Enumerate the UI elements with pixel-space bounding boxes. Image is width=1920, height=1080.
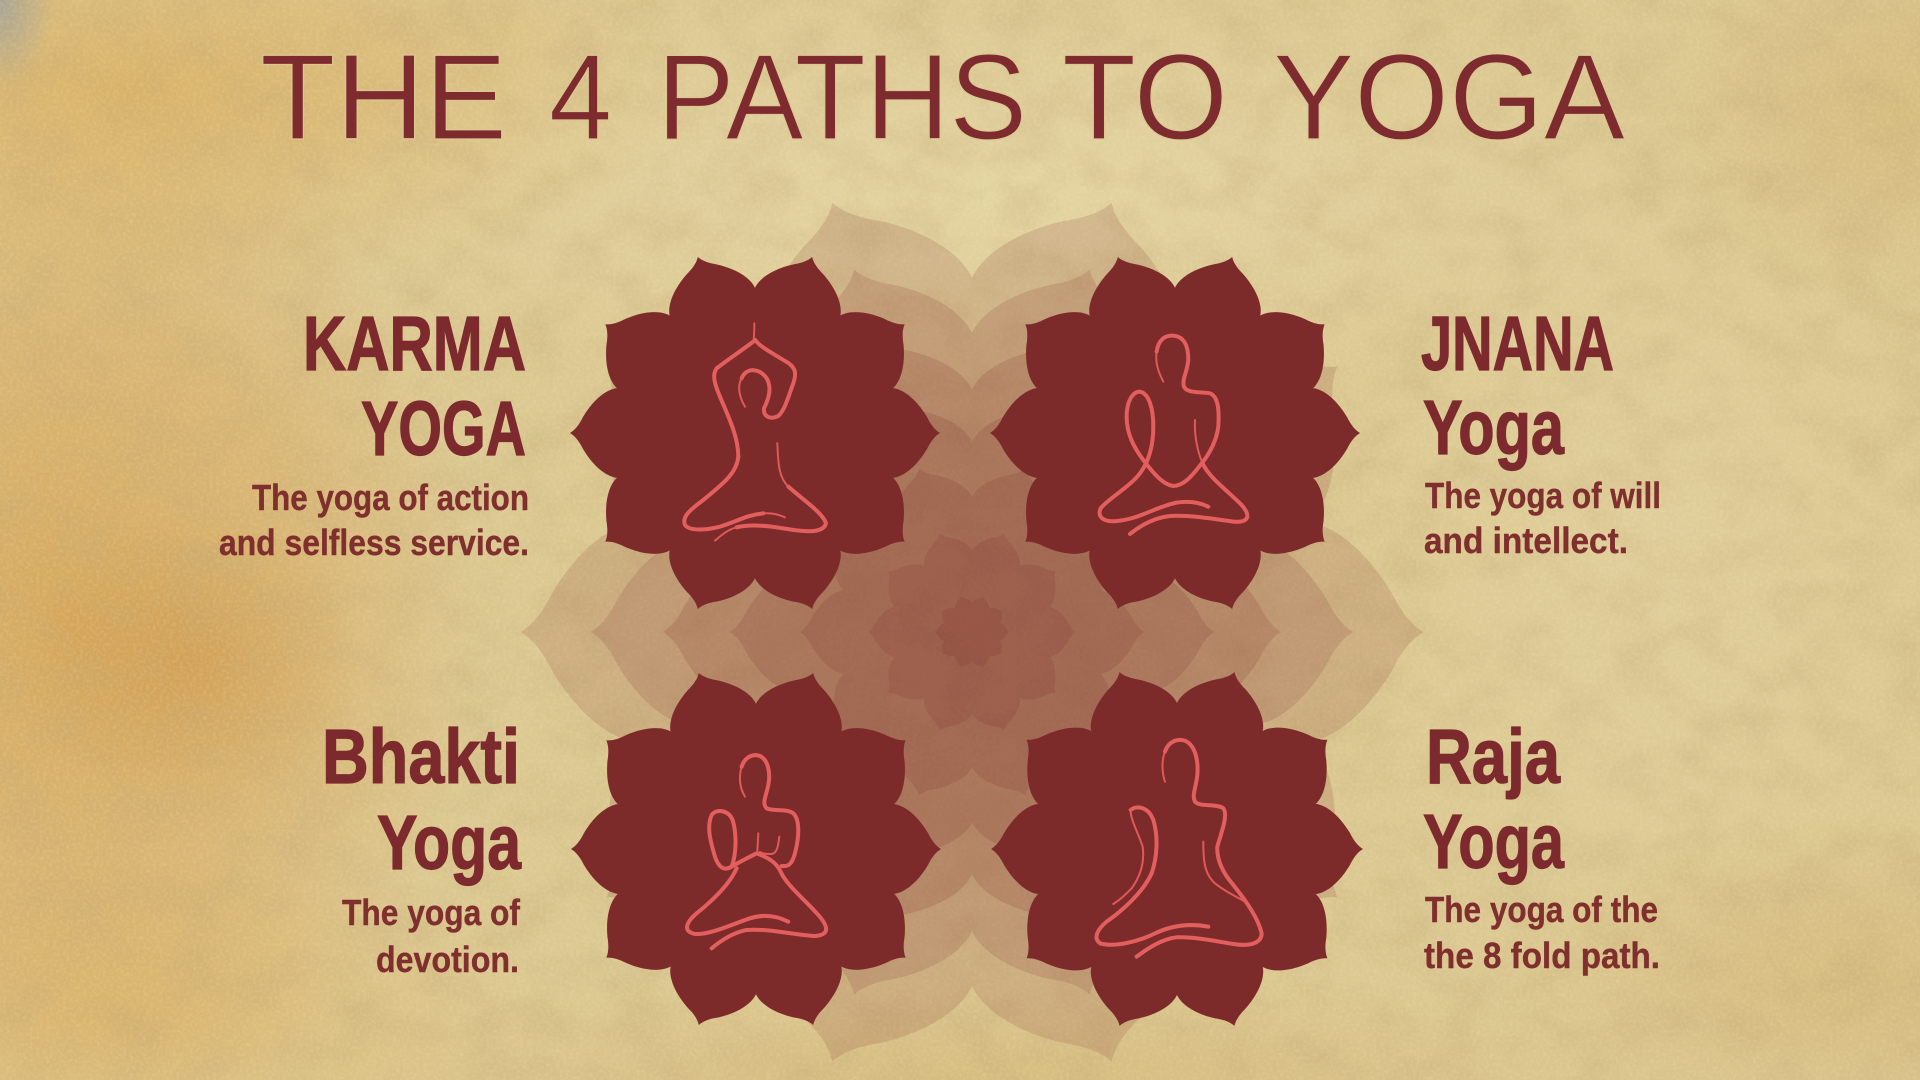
title: 4 bbox=[549, 29, 612, 165]
heading and description: Karma Yoga bbox=[219, 301, 529, 563]
icon: meditating figure, arms raised bbox=[684, 323, 826, 541]
heading and description: Raja Yoga bbox=[1423, 714, 1660, 976]
heading and description: Karma Yoga: and selfless service. bbox=[219, 522, 529, 563]
icon: meditating figure, palms joined bbox=[687, 755, 826, 948]
title: PATHS bbox=[657, 29, 1027, 165]
background layered lotus bbox=[521, 169, 1423, 1061]
heading and description: Bhakti Yoga: Yoga bbox=[377, 800, 522, 886]
heading and description: Karma Yoga: YOGA bbox=[361, 386, 526, 472]
heading and description: Jnana Yoga: JNANA bbox=[1421, 301, 1614, 387]
icon: meditating figure, hands on knees bbox=[1100, 336, 1247, 534]
icon: meditating figure, seated upright bbox=[1097, 740, 1262, 957]
heading and description: Raja Yoga: Raja bbox=[1426, 714, 1561, 800]
heading and description: Jnana Yoga: and intellect. bbox=[1424, 520, 1628, 561]
title bbox=[260, 29, 1626, 165]
heading and description: Raja Yoga: Yoga bbox=[1423, 799, 1565, 885]
icon: lotus badge, Karma bbox=[570, 243, 940, 623]
panel: Jnana Yoga bbox=[990, 243, 1661, 623]
panel: Bhakti Yoga bbox=[322, 659, 941, 1039]
panel: Karma Yoga bbox=[219, 243, 940, 623]
heading and description: Raja Yoga: The yoga of the bbox=[1425, 889, 1658, 930]
heading and description: Raja Yoga: the 8 fold path. bbox=[1424, 935, 1660, 976]
title: TO bbox=[1062, 29, 1228, 165]
panel: Raja Yoga bbox=[991, 658, 1660, 1040]
heading and description: Bhakti Yoga: Bhakti bbox=[322, 714, 520, 800]
heading and description: Jnana Yoga bbox=[1421, 301, 1661, 561]
heading and description: Karma Yoga: KARMA bbox=[303, 301, 526, 387]
icon: lotus badge, Jnana bbox=[990, 243, 1360, 623]
icon: lotus badge, Raja bbox=[991, 658, 1363, 1040]
heading and description: Bhakti Yoga bbox=[322, 714, 522, 980]
heading and description: Jnana Yoga: Yoga bbox=[1423, 385, 1565, 471]
icon: lotus badge, Bhakti bbox=[571, 659, 941, 1039]
heading and description: Jnana Yoga: The yoga of will bbox=[1425, 475, 1661, 516]
title: THE bbox=[260, 29, 507, 165]
title: YOGA bbox=[1273, 29, 1626, 165]
heading and description: Karma Yoga: The yoga of action bbox=[252, 477, 529, 518]
heading and description: Bhakti Yoga: devotion. bbox=[376, 939, 519, 980]
heading and description: Bhakti Yoga: The yoga of bbox=[342, 892, 521, 933]
